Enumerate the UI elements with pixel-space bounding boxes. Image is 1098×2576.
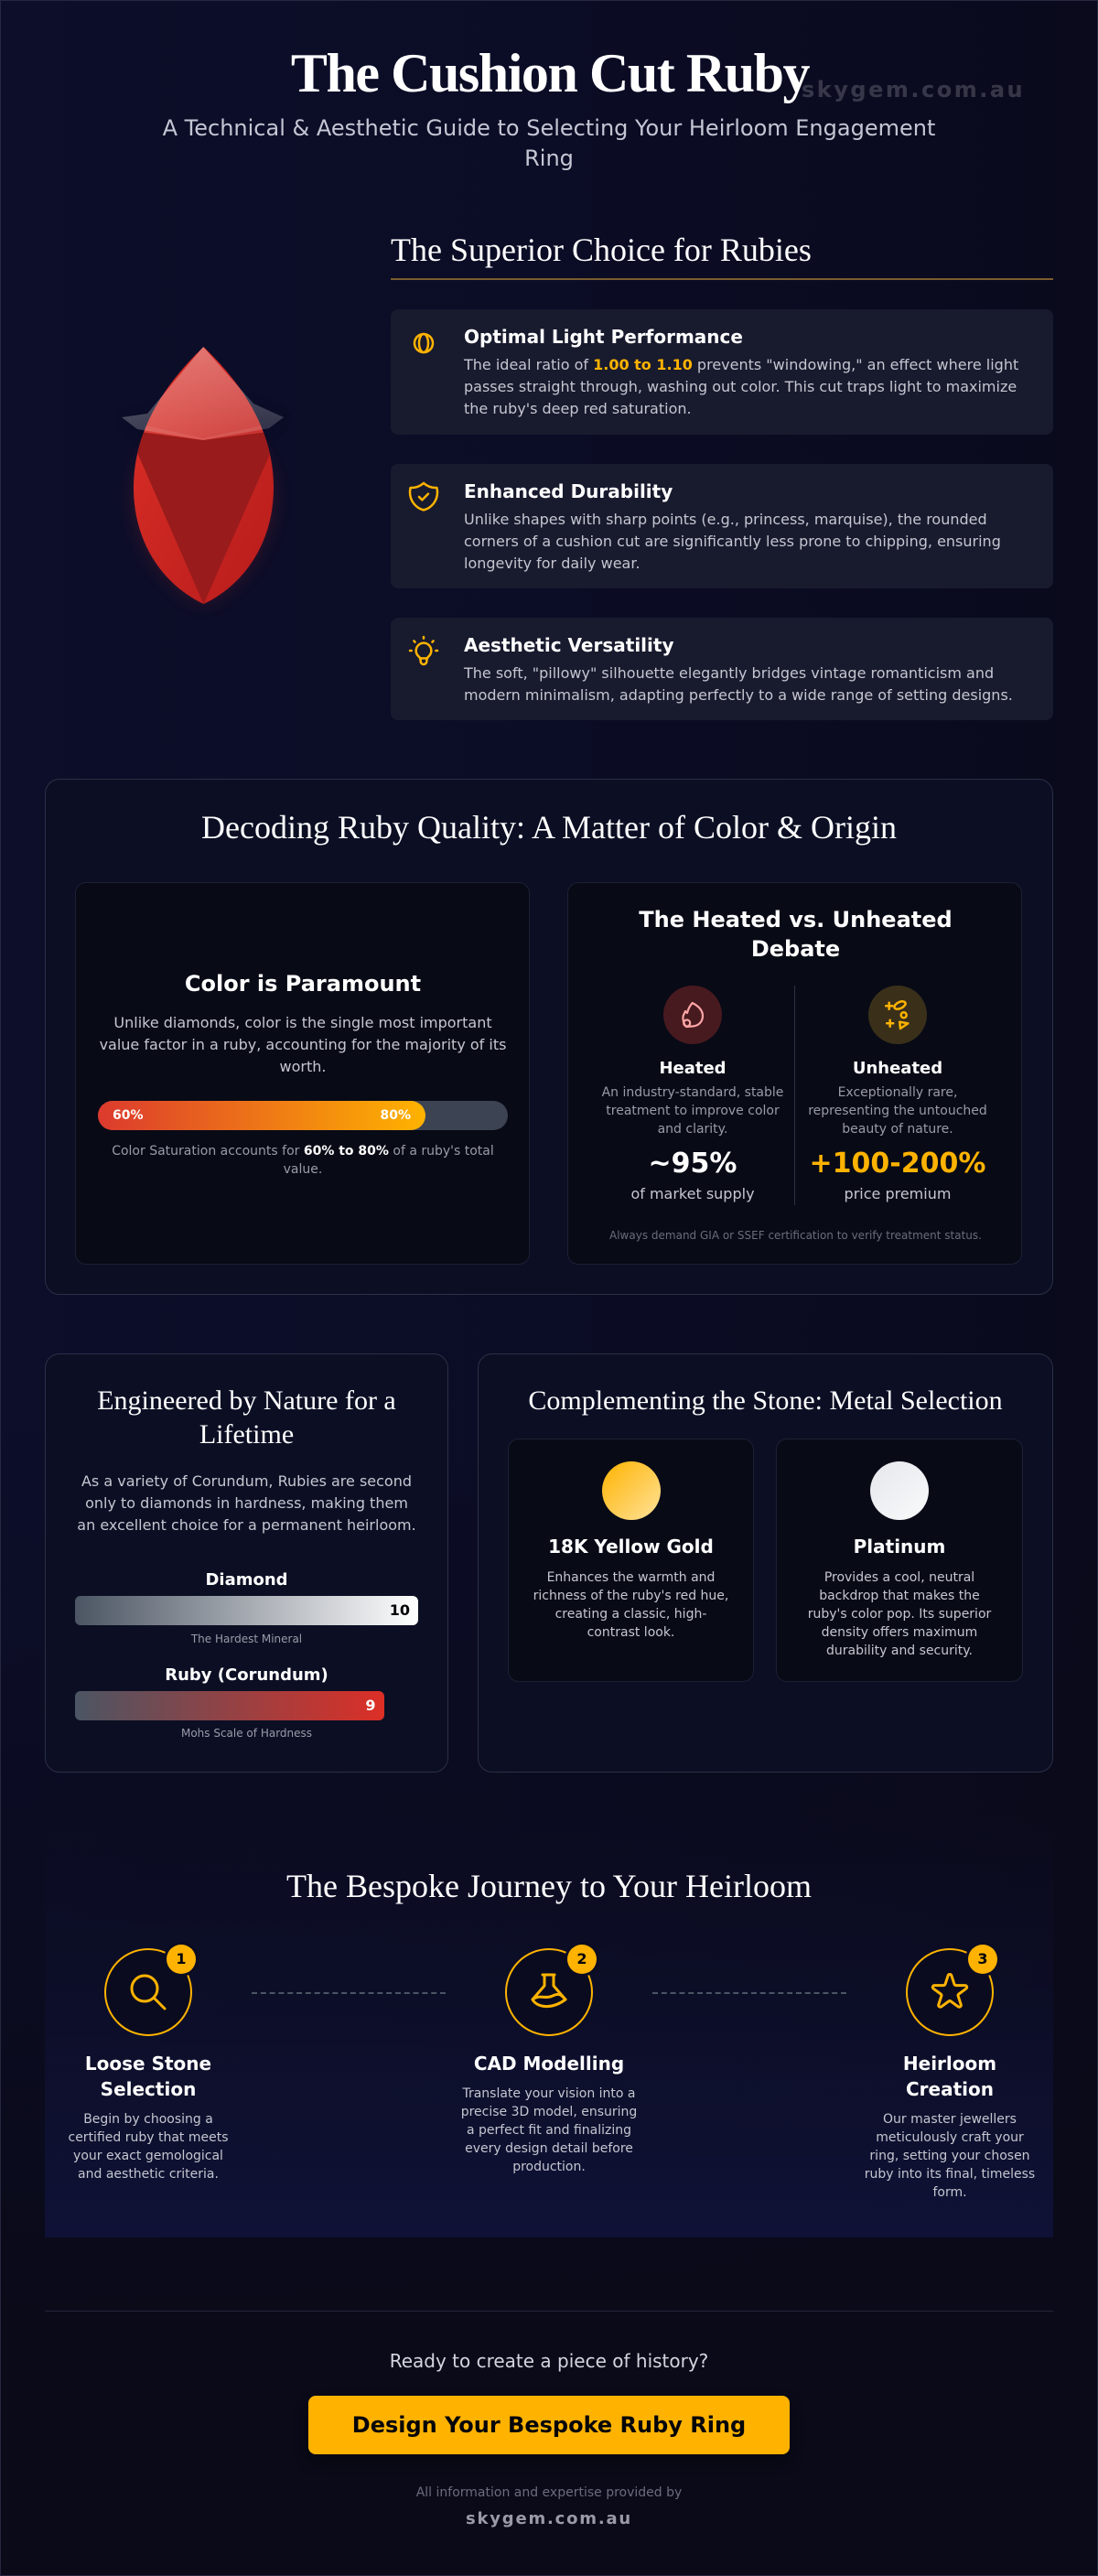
step text: certified ruby that meets [68,2130,229,2145]
step title: Selection [101,2078,196,2100]
swatch: platinum [870,1461,929,1520]
panel heading: Decoding Ruby Quality: A Matter of Color & Origin [201,809,897,846]
panel: decoding ruby quality [45,779,1053,1295]
attribution: All information and expertise provided by [416,2485,682,2500]
step text [865,2112,1035,2200]
subtitle: A Technical & Aesthetic Guide to Selecting Your Heirloom Engagement [163,115,935,141]
feature text [463,356,1018,417]
feature card: aesthetic versatility [391,618,1053,720]
card: platinum [776,1439,1023,1682]
low label: 60% [113,1108,144,1123]
step title [85,2053,211,2100]
section heading: superior choice: The Superior Choice for Rubies [391,232,812,268]
feature text: The soft, "pillowy" silhouette elegantly bridges vintage romanticism and [464,664,994,682]
panel text: an excellent choice for a permanent heirloom. [77,1516,416,1534]
unheated text [808,1085,987,1137]
step icon: star [906,1948,994,2036]
bar fill [98,1101,425,1130]
step title: Heirloom [903,2053,996,2075]
high label: 80% [380,1108,411,1123]
step text: Translate your vision into a [462,2086,636,2101]
icon: shield check [408,481,439,512]
feature title: Optimal Light Performance [464,326,743,348]
metal text: ruby's color pop. Its superior [808,1607,991,1622]
step text: production. [512,2160,586,2174]
step text: form. [932,2185,967,2200]
step text: and aesthetic criteria. [78,2167,219,2182]
step text: a perfect fit and finalizing [467,2123,631,2138]
panel: metal selection [478,1353,1053,1773]
metal text: durability and security. [826,1644,973,1658]
metal text: richness of the ruby's red hue, [533,1589,728,1603]
diamond label: Diamond [205,1570,288,1590]
title: The Cushion Cut Ruby [291,43,809,103]
panel: hardness [45,1353,448,1773]
feature text: The ideal ratio of 1.00 to 1.10 prevents "windowing," an effect where light [464,356,1018,373]
certification note: Always demand GIA or SSEF certification to verify treatment status. [609,1229,982,1242]
card: heated vs unheated [567,882,1022,1265]
value: 10 [390,1601,410,1619]
unheated label: Unheated [853,1059,942,1078]
heated stat label: of market supply [630,1185,755,1202]
heated text [602,1085,783,1137]
call to action prompt: Ready to create a piece of history? [390,2350,708,2372]
feature title: Aesthetic Versatility [464,634,673,656]
feature text: modern minimalism, adapting perfectly to a wide range of setting designs. [464,686,1013,704]
feature text: the ruby's deep red saturation. [464,400,692,417]
connector 1 [252,1992,446,1994]
panel text: As a variety of Corundum, Rubies are second [81,1472,412,1490]
feature title: Enhanced Durability [464,480,673,502]
step badge: 3 [977,1950,988,1967]
metal text: creating a classic, high- [555,1607,706,1622]
heated text: treatment to improve color [606,1104,780,1118]
step text: ruby into its final, timeless [865,2167,1035,2182]
step icon: magnifier [104,1948,192,2036]
metal text: density offers maximum [822,1625,977,1640]
panel heading: Complementing the Stone: Metal Selection [528,1385,1003,1416]
metal name: 18K Yellow Gold [548,1536,714,1557]
watermark: skygem.com.au [802,77,1025,102]
step title: CAD Modelling [474,2053,624,2075]
panel heading: Lifetime [199,1419,294,1450]
card title: The Heated vs. Unheated [639,907,953,932]
heated text: An industry-standard, stable [602,1085,783,1100]
bar caption [112,1144,494,1177]
card title: Debate [751,936,840,962]
header [163,43,1025,171]
bar: diamond hardness 10 [75,1596,418,1625]
diamond caption: The Hardest Mineral [191,1633,302,1645]
metal text: Provides a cool, neutral [824,1570,974,1585]
feature card: enhanced durability [391,464,1053,588]
button [308,2396,790,2454]
icon: sparkles [868,986,927,1044]
step title: Creation [906,2078,994,2100]
panel heading: Engineered by Nature for a [97,1385,396,1416]
feature text: corners of a cushion cut are significantly less prone to chipping, ensuring [464,533,1001,550]
step badge: 1 [176,1950,187,1967]
step text: ring, setting your chosen [869,2149,1030,2163]
panel text [77,1472,416,1534]
step badge [167,1945,196,1974]
card text: Unlike diamonds, color is the single most important [113,1014,492,1031]
step 2 [461,1945,637,2174]
feature text: longevity for daily wear. [464,555,640,572]
step 3 [865,1945,1035,2200]
bar caption: Color Saturation accounts for 60% to 80% of a ruby's total [112,1144,494,1159]
feature text: passes straight through, washing out color. This cut traps light to maximize [464,378,1017,395]
unheated stat: +100-200% [810,1148,985,1180]
swatch: gold [602,1461,661,1520]
bar caption: value. [284,1162,322,1177]
ruby caption: Mohs Scale of Hardness [181,1727,312,1740]
metal text: backdrop that makes the [819,1589,980,1603]
value: 9 [365,1697,375,1714]
footer [45,2311,1053,2539]
step badge [567,1945,597,1974]
step text: every design detail before [465,2141,633,2156]
icon: ring [414,333,434,353]
metal name: Platinum [854,1536,945,1557]
icon: light bulb [408,635,439,666]
card text [100,1014,506,1075]
card text: value factor in a ruby, accounting for the majority of its [100,1036,506,1053]
step text: meticulously craft your [876,2130,1024,2145]
step text: Begin by choosing a [83,2112,213,2127]
heated text: and clarity. [658,1122,727,1137]
panel: bespoke journey [45,1816,1053,2237]
step title [903,2053,996,2100]
step badge [968,1945,997,1974]
unheated stat label: price premium [845,1185,951,1202]
metal text [808,1570,992,1658]
connector 2 [652,1992,846,1994]
subtitle [163,115,935,171]
unheated text: beauty of nature. [842,1122,953,1137]
icon: flame [663,986,722,1044]
panel text: only to diamonds in hardness, making them [85,1494,408,1512]
unheated text: representing the untouched [808,1104,987,1118]
card: color is paramount [75,882,530,1265]
metal text: Enhances the warmth and [547,1570,715,1585]
card text: worth. [280,1058,326,1075]
unheated text: Exceptionally rare, [838,1085,957,1100]
card title [639,907,953,962]
step 1 [68,1945,229,2182]
subtitle: Ring [524,146,574,171]
metal text: contrast look. [587,1625,674,1640]
journey heading: The Bespoke Journey to Your Heirloom [286,1868,812,1904]
column divider [794,986,795,1205]
step title: Loose Stone [85,2053,211,2075]
progress bar: 60% to 80% [98,1101,508,1130]
step text: Our master jewellers [883,2112,1017,2127]
step icon: flask [505,1948,593,2036]
feature card: optimal light performance [391,309,1053,435]
feature text: Unlike shapes with sharp points (e.g., princess, marquise), the rounded [464,511,987,528]
step text [461,2086,637,2174]
metal text [533,1570,728,1640]
feature text [463,664,1013,704]
step text [68,2112,229,2182]
feature text [464,511,1001,572]
heated stat: ~95% [649,1148,737,1180]
column: heated [602,986,783,1202]
bar: ruby hardness 9 [75,1691,384,1720]
column: unheated [808,986,987,1202]
icon: ruby gem illustration [122,347,284,608]
step text: your exact gemological [73,2149,223,2163]
brand: skygem.com.au [466,2509,632,2528]
button: Design Your Bespoke Ruby Ring [352,2412,746,2438]
heading underline [391,278,1053,280]
card: yellow gold [508,1439,754,1682]
step text: precise 3D model, ensuring [461,2105,637,2119]
panel heading [97,1385,396,1450]
card title: Color is Paramount [185,971,421,997]
step badge: 2 [576,1950,587,1967]
heated label: Heated [659,1059,727,1078]
ruby label: Ruby (Corundum) [165,1665,328,1685]
